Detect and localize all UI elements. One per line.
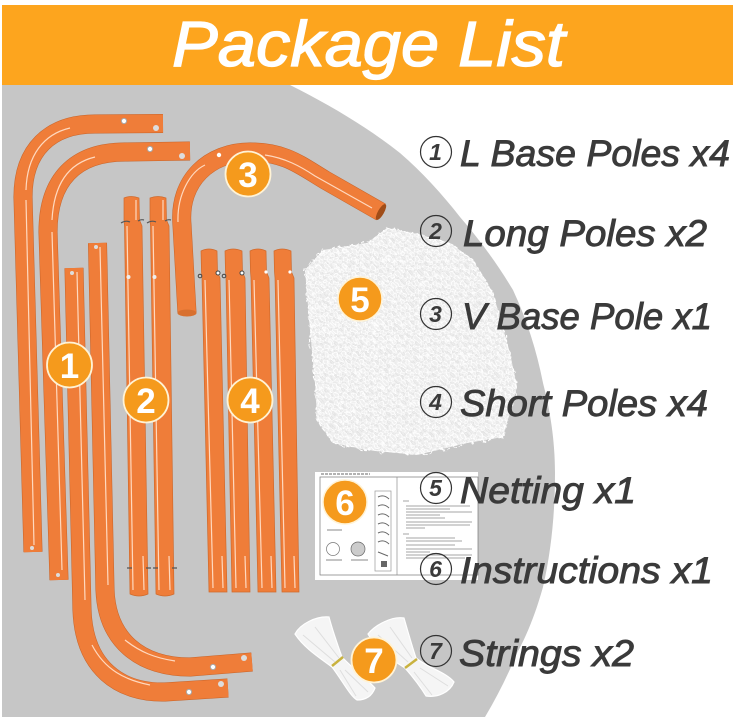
label 4: 4: [428, 389, 442, 415]
net edge: [305, 228, 517, 455]
short poles (item 4): [198, 249, 299, 592]
badge 2: [124, 378, 168, 422]
numbered badges: [47, 152, 396, 682]
diagram: circles: [326, 530, 368, 560]
badge 5: [338, 277, 382, 321]
L base poles (item 1): [23, 118, 252, 695]
gray background shape: [2, 85, 555, 717]
V base pole (item 3): [178, 152, 388, 316]
strings (item 7): [295, 617, 454, 700]
pole: upper L A: [23, 118, 163, 552]
badge 2: 2: [136, 382, 156, 421]
label 1: L Base Poles x4: [460, 133, 730, 174]
label 7: Strings x2: [459, 633, 634, 674]
instruction text lines: [403, 501, 472, 558]
pole: upper L B: [48, 146, 190, 580]
diagram: parts column: [375, 491, 391, 571]
long pole a: [121, 196, 151, 596]
label 3: 3: [429, 301, 442, 327]
long poles (item 2): [121, 196, 177, 596]
short pole 3: [250, 249, 276, 592]
package list labels: [420, 133, 730, 674]
label 5: 5: [429, 475, 443, 501]
pole: lower L C: [70, 268, 228, 695]
label 6: Instructions x1: [460, 550, 713, 591]
badge 1: [47, 342, 92, 388]
badge 3: [226, 152, 270, 196]
badge 4: 4: [240, 382, 260, 421]
header banner: [2, 5, 733, 85]
title: Package List: [172, 8, 567, 80]
label 2: 2: [428, 218, 442, 244]
net mesh texture: [305, 228, 517, 454]
string hank right: [368, 618, 454, 696]
sheet heading: [321, 473, 370, 475]
short pole 4: [274, 249, 299, 592]
badge 1: 1: [60, 347, 79, 386]
net body: [305, 228, 517, 455]
label 4: Short Poles x4: [460, 383, 708, 424]
netting (item 5): [303, 227, 518, 456]
label 3: V Base Pole x1: [462, 296, 712, 337]
label 2: Long Poles x2: [463, 213, 707, 254]
label 6: 6: [429, 556, 442, 582]
pole: lower L D: [94, 243, 252, 670]
short pole 1: [198, 249, 227, 592]
label 7: 7: [429, 638, 443, 664]
badge 7: 7: [364, 642, 384, 681]
instructions sheet (item 6): [315, 472, 478, 580]
label 5: Netting x1: [460, 470, 636, 511]
string hank left: [295, 617, 375, 700]
badge 5: 5: [350, 281, 370, 320]
badge 7: [352, 638, 396, 682]
badge 4: [228, 378, 272, 422]
badge 6: [323, 480, 367, 524]
short pole 2: [222, 249, 250, 592]
badge 6: 6: [335, 484, 355, 523]
badge 3: 3: [238, 156, 258, 195]
long pole b: [147, 196, 177, 596]
label 1: 1: [429, 139, 442, 165]
